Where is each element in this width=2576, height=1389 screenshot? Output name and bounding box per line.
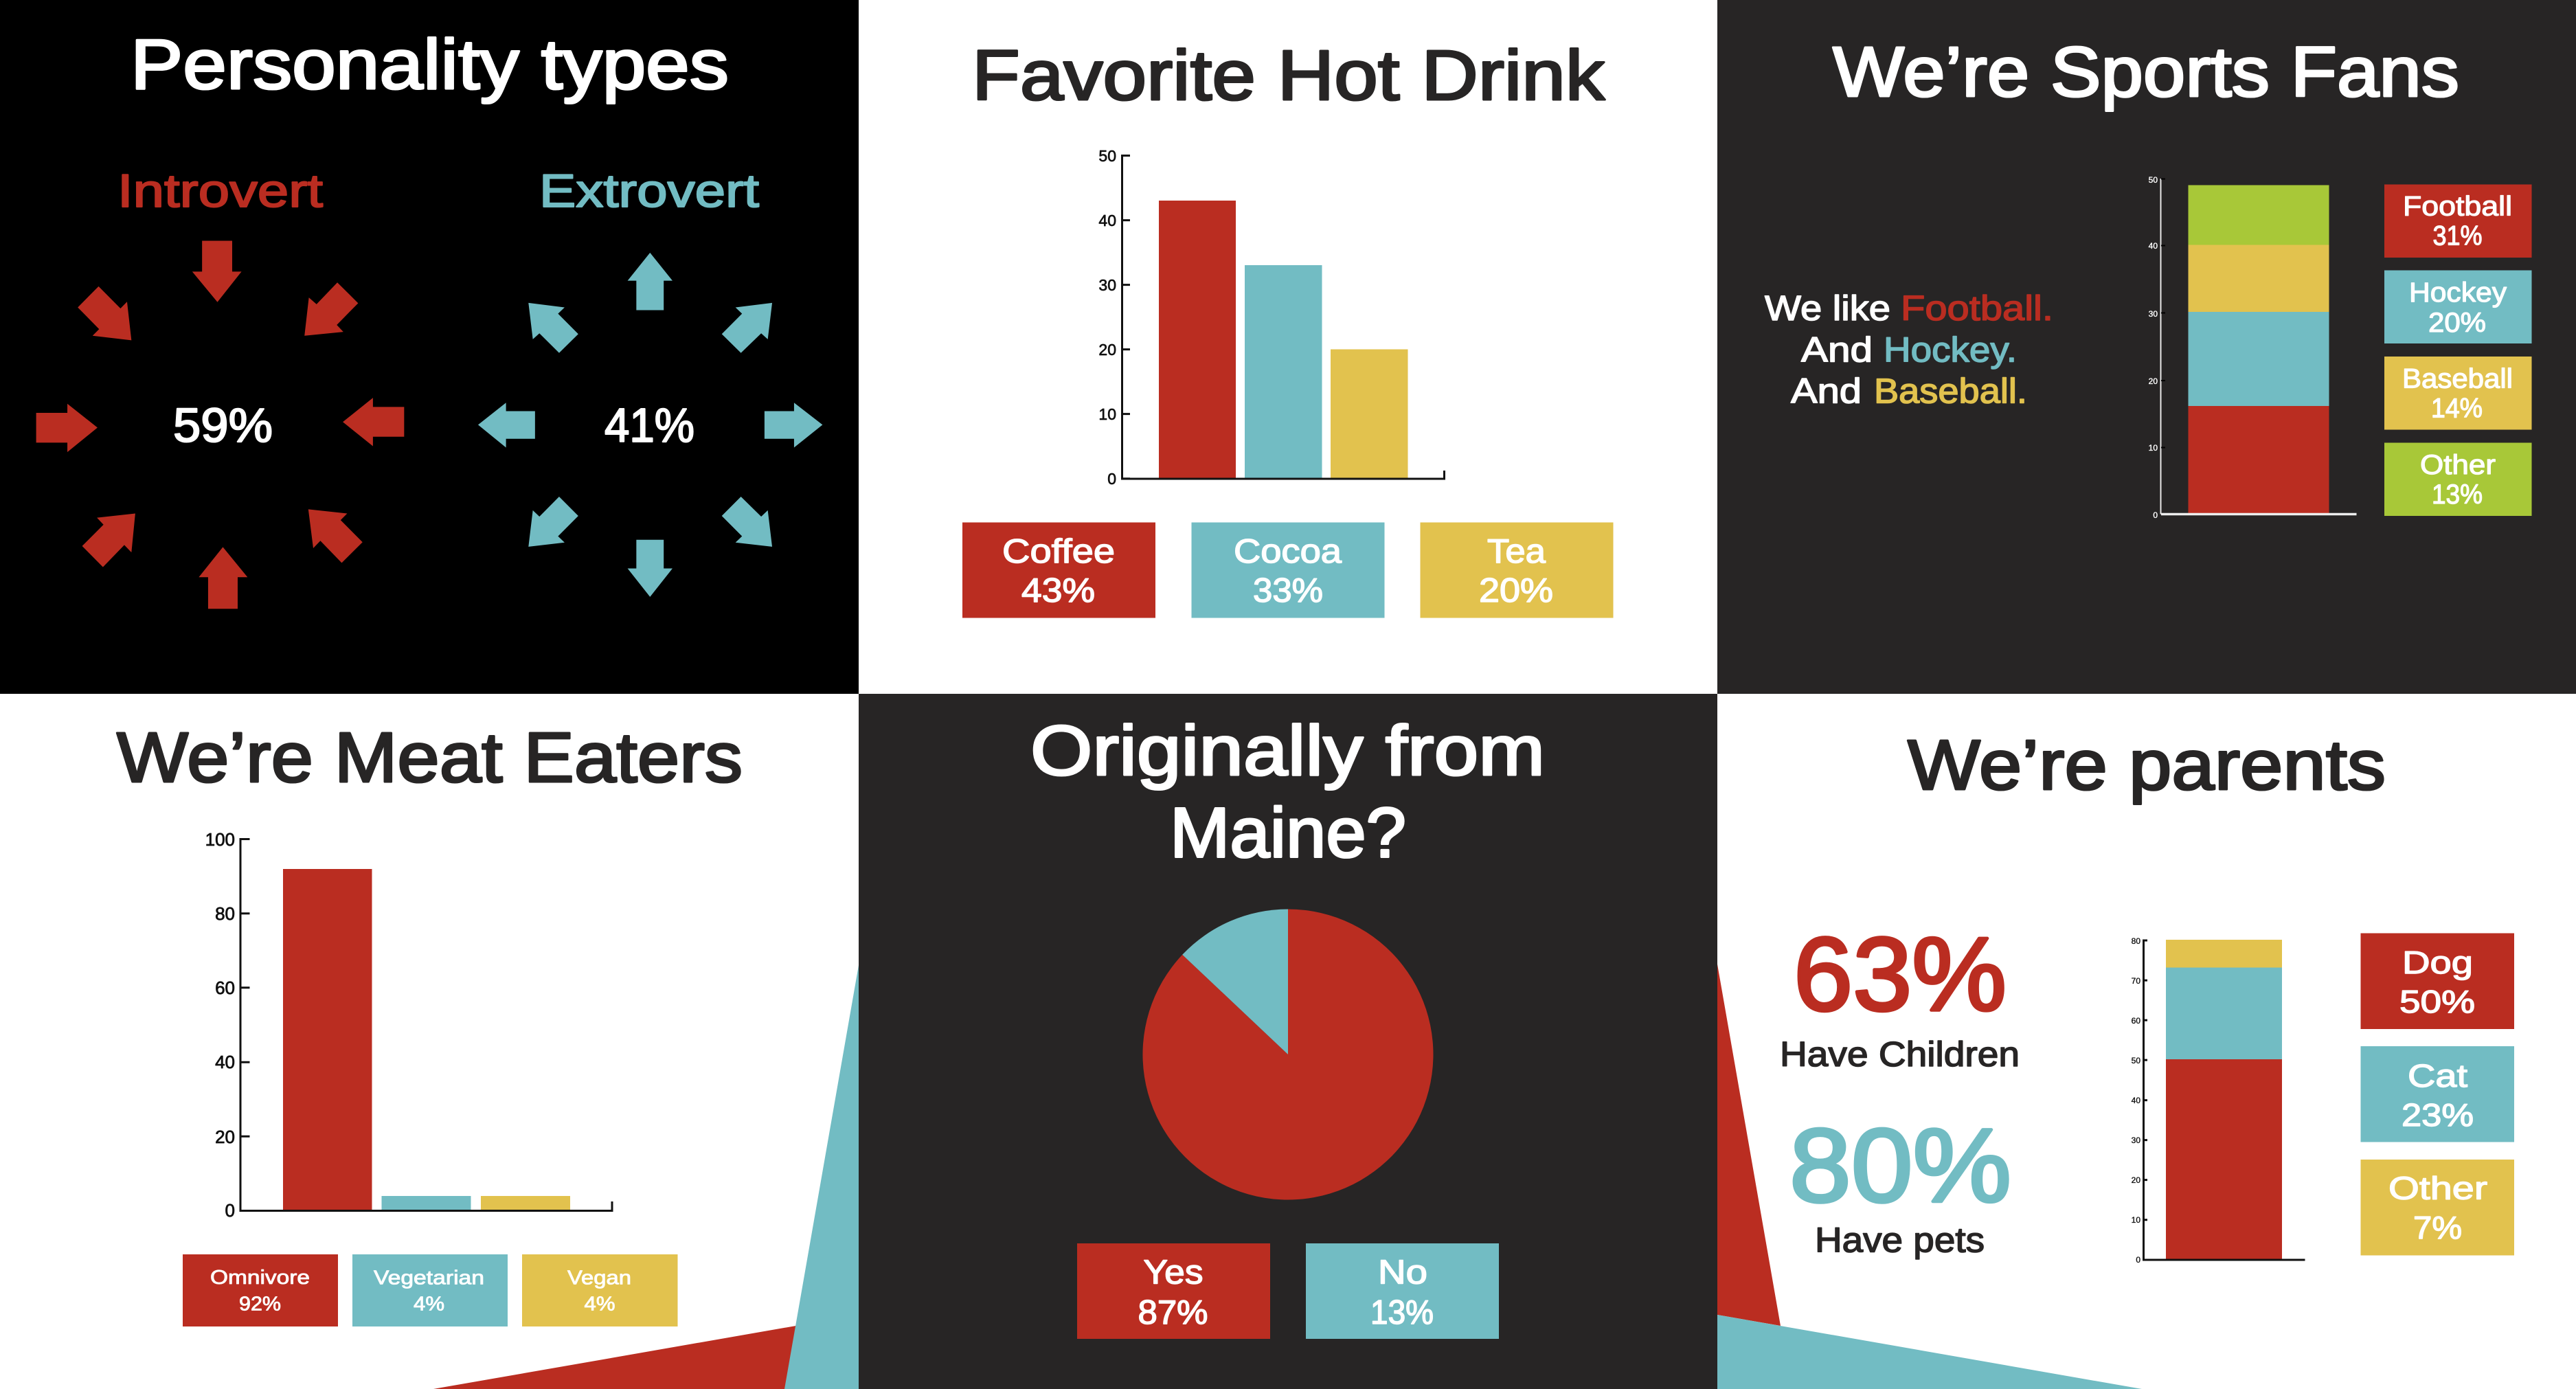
- text block: sports we like: [1765, 289, 2053, 411]
- legend: cocoa: 33%: [1253, 572, 1323, 609]
- title: favorite hot drink: Favorite Hot Drink: [972, 36, 1605, 115]
- panel: sports fans: [1717, 0, 2576, 694]
- legend: vegetarian: [352, 1254, 508, 1326]
- bar chart: diet: 40: [215, 1052, 235, 1072]
- text block: sports we like: And: [1801, 330, 1873, 370]
- legend: football: Football: [2403, 191, 2512, 221]
- decorative wedge: red: [433, 1324, 804, 1389]
- stacked bar chart: pets: [2132, 936, 2305, 1265]
- legend: yes: [1077, 1243, 1270, 1339]
- heading: introvert: Introvert: [117, 165, 323, 217]
- icon: inward red arrows: [36, 241, 404, 609]
- legend: cocoa: [1191, 522, 1385, 618]
- legend: coffee: [962, 522, 1155, 618]
- icon: outward teal arrows: [478, 253, 822, 597]
- bar chart: diet: 20: [215, 1127, 235, 1147]
- legend: dog: [2360, 933, 2514, 1029]
- pie chart: from maine: [1142, 909, 1433, 1199]
- stacked bar chart: pets: 10: [2132, 1215, 2140, 1225]
- bar chart: diet: 100: [205, 829, 235, 850]
- legend: vegan: [522, 1254, 677, 1326]
- bar chart: hot drinks: 40: [1098, 212, 1116, 229]
- decorative wedge: red: [1717, 964, 1781, 1326]
- stat: have pets: 80%: [1789, 1107, 2011, 1224]
- legend: hockey: 20%: [2428, 308, 2486, 338]
- stacked bar chart: sports: 50: [2149, 175, 2158, 185]
- legend: coffee: 43%: [1021, 572, 1095, 609]
- stat: 41 percent: 41%: [605, 398, 694, 452]
- bar chart: diet: [205, 829, 612, 1221]
- stacked bar chart: pets: 30: [2132, 1136, 2140, 1145]
- legend: hockey: [2384, 271, 2532, 343]
- legend: no: No: [1378, 1254, 1427, 1291]
- stat: have children: Have Children: [1780, 1035, 2020, 1074]
- stacked bar chart: sports: 20: [2149, 376, 2158, 386]
- title: originally from maine: Maine?: [1170, 793, 1406, 872]
- stacked bar chart: pets: 0: [2136, 1255, 2140, 1265]
- legend: vegetarian: Vegetarian: [374, 1267, 484, 1289]
- stacked bar chart: pets: 80: [2132, 936, 2140, 946]
- bar chart: hot drinks: 10: [1098, 405, 1116, 423]
- legend: coffee: Coffee: [1002, 533, 1115, 570]
- bar chart: hot drinks: 50: [1098, 147, 1116, 165]
- legend: yes: Yes: [1143, 1254, 1204, 1291]
- legend: omnivore: Omnivore: [210, 1267, 310, 1289]
- bar chart: diet: 60: [215, 978, 235, 998]
- stacked bar chart: pets: 20: [2132, 1175, 2140, 1185]
- legend: omnivore: 92%: [239, 1293, 281, 1315]
- stacked bar chart: pets: 50: [2132, 1056, 2140, 1065]
- panel: meat eaters: [0, 694, 859, 1389]
- legend: cat: 23%: [2402, 1097, 2474, 1133]
- legend: omnivore: [183, 1254, 338, 1326]
- legend: other pets: 7%: [2413, 1210, 2462, 1245]
- stat: 59 percent: 59%: [173, 398, 273, 452]
- decorative wedge: teal: [1717, 1315, 2142, 1389]
- title: meat eaters: We’re Meat Eaters: [117, 718, 743, 797]
- legend: vegan: 4%: [584, 1293, 615, 1315]
- legend: dog: Dog: [2402, 945, 2473, 980]
- heading: extrovert: Extrovert: [539, 165, 759, 217]
- legend: yes: 87%: [1138, 1294, 1208, 1331]
- legend: other sports: Other: [2420, 450, 2496, 480]
- title: originally from maine: [1030, 711, 1545, 872]
- legend: baseball: [2384, 357, 2532, 430]
- stacked bar chart: sports: 10: [2149, 443, 2158, 453]
- stacked bar chart: pets: 70: [2132, 976, 2140, 986]
- legend: cat: Cat: [2408, 1058, 2467, 1094]
- text block: sports we like: Hockey.: [1884, 330, 2017, 370]
- text block: sports we like: Football.: [1901, 289, 2053, 328]
- legend: tea: [1421, 522, 1613, 618]
- title: personality types: Personality types: [131, 25, 729, 104]
- legend: football: 31%: [2433, 221, 2483, 251]
- legend: cocoa: Cocoa: [1234, 533, 1342, 570]
- bar chart: diet: 80: [215, 903, 235, 924]
- panel: favorite hot drink: [859, 0, 1717, 694]
- bar chart: hot drinks: [1098, 147, 1444, 488]
- stacked bar chart: sports: 30: [2149, 309, 2158, 319]
- stat: have children: [1780, 916, 2020, 1074]
- legend: cat: [2360, 1046, 2514, 1142]
- bar chart: hot drinks: 30: [1098, 276, 1116, 294]
- legend: no: 13%: [1370, 1294, 1434, 1331]
- legend: tea: 20%: [1479, 572, 1553, 609]
- title: parents: We’re parents: [1908, 725, 2386, 804]
- stacked bar chart: pets: 40: [2132, 1096, 2140, 1105]
- bar chart: hot drinks: 20: [1098, 341, 1116, 359]
- text block: sports we like: Baseball.: [1874, 371, 2027, 411]
- legend: other pets: [2360, 1160, 2514, 1256]
- stacked bar chart: sports: 0: [2153, 510, 2158, 520]
- stacked bar chart: pets: 60: [2132, 1016, 2140, 1026]
- text block: sports we like: We like: [1765, 289, 1890, 328]
- legend: no: [1306, 1243, 1499, 1339]
- panel: parents: [1717, 694, 2576, 1389]
- text block: sports we like: And: [1791, 371, 1862, 411]
- title: sports fans: We’re Sports Fans: [1833, 32, 2459, 111]
- stat: have children: 63%: [1794, 916, 2007, 1033]
- legend: other sports: 13%: [2432, 479, 2483, 510]
- legend: hockey: Hockey: [2409, 278, 2507, 308]
- legend: other pets: Other: [2388, 1171, 2487, 1206]
- panel: originally from maine: [859, 694, 1717, 1389]
- stacked bar chart: sports: 40: [2149, 241, 2158, 251]
- legend: vegetarian: 4%: [414, 1293, 444, 1315]
- bar chart: diet: 0: [225, 1200, 235, 1221]
- legend: other sports: [2384, 442, 2532, 516]
- legend: tea: Tea: [1487, 533, 1546, 570]
- stacked bar chart: sports: [2149, 175, 2356, 520]
- legend: baseball: 14%: [2431, 393, 2483, 423]
- title: originally from maine: Originally from: [1030, 711, 1545, 790]
- legend: baseball: Baseball: [2402, 364, 2513, 394]
- legend: football: [2384, 184, 2532, 258]
- bar chart: hot drinks: 0: [1107, 470, 1116, 488]
- stat: have pets: Have pets: [1815, 1220, 1985, 1260]
- legend: dog: 50%: [2399, 984, 2475, 1019]
- legend: vegan: Vegan: [567, 1267, 631, 1289]
- decorative wedge: teal: [784, 965, 859, 1389]
- panel: personality types: [0, 0, 859, 694]
